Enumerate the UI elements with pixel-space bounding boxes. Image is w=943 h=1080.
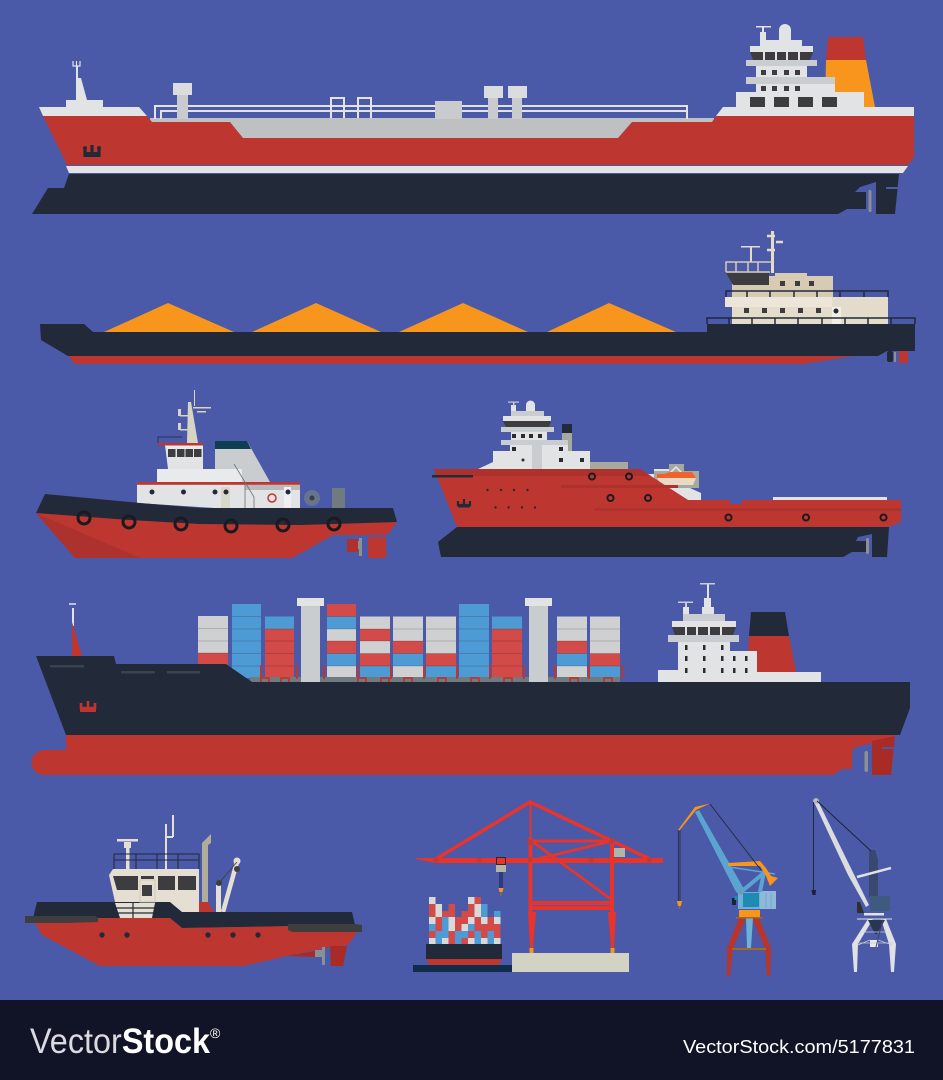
harbour tug wheelhouse xyxy=(109,854,199,918)
icon: container anchor xyxy=(80,701,96,712)
crane: blue and orange portal crane xyxy=(677,804,778,976)
portal crane boom xyxy=(695,810,744,895)
VectorStock logo: ® xyxy=(210,1025,221,1041)
container deck towers xyxy=(297,598,552,683)
grey crane counter arm xyxy=(857,868,891,877)
tanker propeller xyxy=(868,190,872,212)
supply navy lower hull xyxy=(438,527,889,557)
tanker navy lower hull xyxy=(32,174,903,214)
portal crane red legs xyxy=(727,918,771,976)
container bridge superstructure xyxy=(658,583,821,682)
container rudder and propeller xyxy=(864,736,895,775)
grey crane machine house xyxy=(857,896,890,913)
grey crane hook xyxy=(812,890,816,895)
container stacks xyxy=(198,604,620,678)
tanker upper white deck xyxy=(39,107,147,116)
stack 5 xyxy=(360,616,390,678)
stack 4 xyxy=(327,604,356,678)
gantry suspended box xyxy=(614,848,625,857)
tug navy bulwark xyxy=(36,494,397,525)
harbour tug funnel xyxy=(202,834,211,902)
supply tyre fenders xyxy=(589,474,886,520)
harbour tug davit xyxy=(199,858,240,912)
ship: oil tanker xyxy=(32,24,914,214)
portal crane counterweight arm xyxy=(728,861,778,886)
tanker grey cargo deck xyxy=(230,122,632,138)
quay slab and water line xyxy=(413,953,629,972)
gantry trolley and hook xyxy=(496,858,506,895)
tanker bridge superstructure xyxy=(736,24,864,108)
grey crane base plates xyxy=(857,913,892,920)
supply aft deck plate xyxy=(773,497,887,500)
grey crane cables xyxy=(814,801,871,890)
harbour tug red hull xyxy=(33,918,357,966)
bulk carrier navy hull xyxy=(40,324,915,356)
portal crane base xyxy=(736,910,763,918)
harbour tug rudder and propeller xyxy=(287,946,347,966)
VectorStock logo: VectorStock xyxy=(30,1022,210,1061)
grey crane mast xyxy=(869,850,878,897)
tanker funnel xyxy=(825,37,875,107)
quay ship containers xyxy=(429,897,500,944)
supply funnel xyxy=(562,424,572,451)
tug red hull xyxy=(36,513,397,558)
stack 8 xyxy=(459,604,489,678)
stack 6 xyxy=(393,616,423,678)
portal crane a-frame xyxy=(729,867,775,894)
bulk cargo heaps xyxy=(104,303,676,332)
tanker forecastle and mast xyxy=(66,61,103,108)
footer band xyxy=(0,1000,943,1080)
supply red hull xyxy=(434,469,901,527)
icon: tanker anchor xyxy=(83,145,101,157)
gantry feet xyxy=(530,948,614,953)
ship: container vessel xyxy=(32,583,910,775)
stack 7 xyxy=(426,616,456,678)
gantry crane with ship at quay xyxy=(413,802,663,972)
ship: offshore supply vessel xyxy=(432,400,901,557)
container funnel xyxy=(747,612,796,672)
harbour tug side fenders xyxy=(25,916,362,932)
gantry joints xyxy=(434,838,652,862)
container red lower hull with bulb xyxy=(32,734,895,775)
portal crane cables xyxy=(678,804,761,901)
stack 11 xyxy=(590,616,620,678)
container deck and lashing xyxy=(250,665,622,682)
portal crane orange jib xyxy=(678,804,710,831)
stack 2 xyxy=(232,604,261,678)
harbour tug mast and radar xyxy=(117,815,174,870)
bulk carrier rudder and propeller xyxy=(887,351,908,363)
tanker rudder notch xyxy=(886,187,898,189)
bulk carrier superstructure xyxy=(707,231,915,324)
grey crane white legs xyxy=(852,919,896,972)
portal crane cab xyxy=(732,891,776,909)
tanker red hull xyxy=(43,116,914,165)
tug mast and antennas xyxy=(178,390,211,443)
quay ship xyxy=(426,944,502,965)
tug tyre fenders xyxy=(78,512,340,532)
image reference text: VectorStock.com/5177831 xyxy=(683,1037,915,1057)
tug wheelhouse xyxy=(157,437,242,482)
bulk carrier red keel xyxy=(68,356,853,364)
stack 1 xyxy=(198,616,228,666)
tug winch and deck box xyxy=(304,488,345,508)
crane: grey portal crane xyxy=(812,798,896,972)
harbour tug navy bulwark xyxy=(33,902,355,928)
tanker waterline band xyxy=(66,166,908,173)
harbour tug portholes xyxy=(99,932,261,938)
ship: harbour tug xyxy=(25,815,362,966)
supply portholes and anchor xyxy=(458,489,536,509)
ship: tugboat xyxy=(36,390,397,558)
container bow mast xyxy=(69,604,82,656)
portal crane hook xyxy=(677,901,682,908)
tanker deck pipes and vents xyxy=(150,83,714,122)
supply superstructure xyxy=(478,400,628,469)
container navy hull xyxy=(36,656,910,735)
tug main deckhouse xyxy=(137,464,300,509)
grey crane boom xyxy=(814,801,869,907)
supply propeller xyxy=(866,538,869,554)
gantry red frame xyxy=(416,802,663,948)
container seams xyxy=(198,616,620,666)
stack 10 xyxy=(557,616,587,678)
stack 9 xyxy=(492,616,522,678)
grey crane boom tip xyxy=(813,798,819,804)
stack 3 xyxy=(265,616,294,678)
tug rudder and propeller xyxy=(347,537,386,558)
supply lifeboat station xyxy=(645,464,701,500)
tug exhaust housing xyxy=(215,441,270,482)
ship: bulk carrier xyxy=(40,231,915,364)
